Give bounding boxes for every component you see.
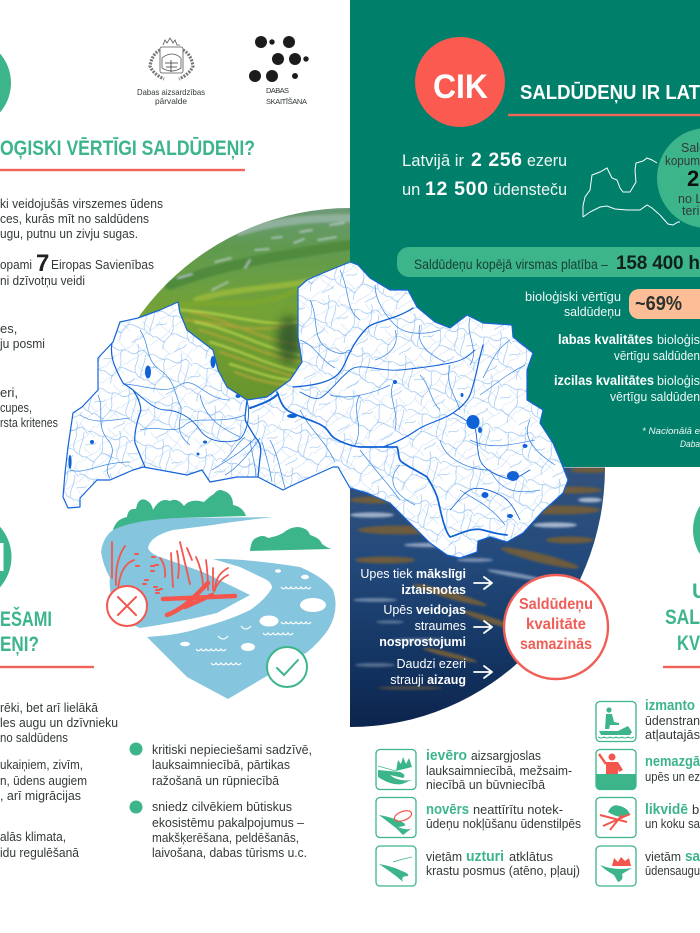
stat bar: total surface area: [397, 247, 700, 277]
bullet: critical for society: lauksaimniecībā, pārtikas: [152, 757, 290, 772]
action: maintain open banks: vietām: [426, 849, 462, 864]
bullet: ecosystem services: [130, 799, 307, 860]
stat: biologically valuable: bioloģiski vērtīgu: [525, 289, 621, 304]
bullet: ecosystem services: laivošana, dabas tūrisms u.c.: [152, 845, 307, 860]
heading: why needed: EŠAMI: [0, 607, 52, 631]
stat: excellent quality: izcilas kvalitātes: [554, 372, 654, 388]
stat: biologically valuable: [525, 289, 700, 319]
icon: river with shore: [379, 857, 412, 882]
text: lakes and watercourses: 2 256: [471, 149, 522, 171]
bullet: critical for society: ražošanā un rūpniecībā: [152, 773, 280, 788]
icon: river and forest: [378, 757, 412, 784]
text block: seven habitat types: opami: [0, 257, 32, 272]
callout: freshwater share: teri: [682, 204, 699, 218]
bullet: ecosystem services: ekosistēmu pakalpojumus –: [152, 815, 305, 830]
logo caption: Dabas aizsardzības: [137, 87, 205, 97]
action: mow aquatic plants: vietām: [645, 849, 681, 864]
text: lakes and watercourses: [402, 149, 567, 200]
text block: habitats: rēki, bet arī lielākā: [0, 700, 99, 715]
callout: quality decreases: Saldūdeņu: [519, 596, 593, 613]
icon: coat of arms: [150, 38, 193, 79]
text block: threats on water photo: Upēs veidojas: [383, 603, 466, 617]
map outline: [63, 262, 568, 558]
text block: food and migration: n, ūdens augiem: [0, 773, 87, 788]
stat: good quality: labas kvalitātes: [558, 331, 653, 347]
stat: biologically valuable: ~69%: [635, 293, 682, 315]
panel: bottom-right water photo quadrant: [350, 467, 610, 727]
logo: Dabas aizsardzības pārvalde: [137, 38, 205, 106]
logo caption: [266, 86, 307, 106]
stat bar: total surface area: 158 400 h: [616, 253, 700, 274]
icon: aquatic plants: [600, 857, 632, 882]
map: Latvia rivers: [60, 260, 570, 560]
stat: excellent quality: [554, 372, 700, 404]
text block: definition: ces, kurās mīt no saldūdens: [0, 211, 149, 226]
text block: habitats: [0, 700, 118, 745]
action: keep protection zones: niecībā un būvniecībā: [426, 777, 546, 792]
bullet: ecosystem services: sniedz cilvēkiem būtiskus: [152, 799, 292, 814]
text: lakes and watercourses: Latvijā ir: [402, 152, 464, 170]
footnote: * Nacionālā e: [642, 426, 700, 437]
text block: lakes and rapids: rsta kritenes: [0, 415, 58, 430]
callout: freshwater share: [657, 128, 700, 228]
river: healthy lower part: [147, 559, 336, 699]
illustration: river before and after: [101, 490, 336, 699]
text block: climate: alās klimata,: [0, 829, 66, 844]
stat bar: total surface area: Saldūdeņu kopējā virsmas platība –: [414, 257, 608, 272]
action: keep protection zones: aizsargjoslas: [471, 748, 541, 763]
text block: lakes and rapids: [0, 385, 58, 430]
icon: CIK circle: [415, 37, 505, 127]
reeds and fallen branches: [112, 542, 235, 615]
logo: Dabas skaitīšana: [249, 36, 309, 106]
trees: small: [250, 527, 331, 551]
text: lakes and watercourses: ūdensteču: [493, 181, 567, 199]
text: lakes and watercourses: 12 500: [425, 178, 488, 200]
text block: threats on water photo: Upes tiek mākslīgi: [360, 567, 466, 581]
text block: seven habitat types: Eiropas Savienības: [51, 257, 154, 272]
action: maintain open banks: krastu posmus (atēno, pļauj): [426, 863, 580, 878]
heading: how to improve quality: [663, 580, 700, 668]
text block: climate: idu regulēšanā: [0, 845, 80, 860]
action: maintain open banks: uzturi: [466, 849, 504, 865]
text: lakes and watercourses: ezeru: [527, 152, 567, 170]
text block: threats on water photo: strauji aizaug: [390, 673, 466, 687]
action: remove beaver dams: [596, 798, 700, 838]
logo caption: [137, 87, 205, 106]
text block: lakes and rapids: cupes,: [0, 400, 32, 415]
icon: washing person: [599, 754, 623, 774]
text block: seven habitat types: 7: [36, 250, 49, 277]
callout: quality decreases: [504, 575, 608, 679]
medium streams: [70, 270, 555, 525]
action: maintain open banks: [376, 846, 580, 886]
text block: springs and streams: es,: [0, 321, 17, 336]
action: keep protection zones: lauksaimniecībā, mežsaim-: [426, 763, 572, 778]
text block: threats on water photo: Daudzi ezeri: [397, 657, 466, 671]
action: keep protection zones: ievēro: [426, 748, 467, 764]
text block: definition: [0, 196, 163, 241]
heading: biologically valuable freshwaters: OĢISKI VĒRTĪGI SALDŪDEŅI?: [0, 137, 255, 160]
footnote: [642, 426, 700, 450]
action: remove beaver dams: b: [692, 802, 699, 817]
text block: seven habitat types: ni dzīvotņu veidi: [0, 273, 85, 288]
action: maintain open banks: atklātus: [509, 849, 553, 864]
text block: food and migration: , arī migrācijas: [0, 788, 81, 803]
text block: climate: [0, 829, 80, 860]
text block: seven habitat types: [0, 250, 154, 288]
callout: quality decreases: kvalitāte: [526, 616, 586, 633]
trees: large: [113, 490, 246, 530]
panel: top-left photo quadrant: [138, 208, 350, 400]
text block: threats on water photo: [360, 567, 466, 687]
stat: biologically valuable: saldūdeņu: [564, 304, 621, 319]
icon: Latvia outline: [583, 158, 680, 225]
action: prevent wastewater: neattīrītu notek-: [473, 802, 563, 817]
bullet: critical for society: [130, 742, 312, 788]
action: use water transport: izmanto: [645, 698, 695, 714]
text block: definition: ki veidojušās virszemes ūdens: [0, 196, 163, 211]
callout: quality decreases: samazinās: [520, 636, 592, 653]
bullet: ecosystem services: makšķerēšana, peldēšanās,: [152, 830, 299, 845]
action: mow aquatic plants: [596, 846, 700, 886]
logo caption: DABAS: [266, 86, 289, 95]
icon: pipe over river: [379, 809, 413, 835]
main rivers: [111, 308, 530, 537]
action: prevent wastewater: novērs: [426, 802, 469, 818]
text block: threats on water photo: straumes: [415, 619, 466, 633]
arrows: [474, 577, 492, 678]
text block: springs and streams: [0, 321, 45, 351]
text block: food and migration: ukaiņiem, zivīm,: [0, 757, 83, 772]
action: use water transport: atļautajās: [645, 727, 700, 742]
green circle: middle left: [0, 512, 12, 602]
action: keep protection zones: [376, 748, 572, 792]
text block: springs and streams: ju posmi: [0, 336, 45, 351]
text block: threats on water photo: iztaisnotas: [401, 583, 466, 597]
action: prevent wastewater: [376, 798, 581, 838]
text block: habitats: no saldūdens: [0, 730, 68, 745]
bullet: critical for society: kritiski nepieciešami sadzīvē,: [152, 742, 312, 757]
action: use water transport: [596, 698, 700, 742]
lakes: [68, 356, 528, 518]
green circle: top left: [0, 38, 11, 128]
icon: check: [267, 647, 307, 687]
stat: excellent quality: bioloģis: [657, 373, 700, 388]
white pebbles and waves: [180, 569, 326, 665]
text: lakes and watercourses: un: [402, 181, 420, 199]
text block: definition: ugu, putnu un zivju sugas.: [0, 226, 138, 241]
stat: good quality: bioloģis: [657, 332, 700, 347]
logo caption: SKAITĪŠANA: [266, 97, 307, 106]
text block: food and migration: [0, 757, 87, 803]
icon: dots: [249, 36, 309, 82]
action: prevent wastewater: ūdeņu nokļūšanu ūdenstilpēs: [426, 816, 581, 831]
action: remove beaver dams: likvidē: [645, 802, 688, 818]
panel: how much freshwater (teal): [350, 0, 700, 467]
icon: cross: [107, 586, 147, 626]
action: do not wash: [596, 750, 700, 790]
text block: threats on water photo: nosprostojumi: [379, 635, 466, 649]
green circle: middle right: [693, 485, 700, 575]
heading: why needed: [0, 607, 94, 668]
river: degraded upper part: [101, 517, 273, 628]
text block: lakes and rapids: eri,: [0, 385, 18, 400]
heading: why needed: EŅI?: [0, 633, 39, 656]
icon: beaver and logs: [600, 805, 630, 830]
icon: jet ski: [598, 707, 634, 738]
stat: good quality: [558, 331, 700, 363]
icon: CIK circle: CIK: [433, 68, 488, 106]
text block: habitats: les augu un dzīvnieku: [0, 715, 118, 730]
logo caption: pārvalde: [155, 96, 187, 106]
